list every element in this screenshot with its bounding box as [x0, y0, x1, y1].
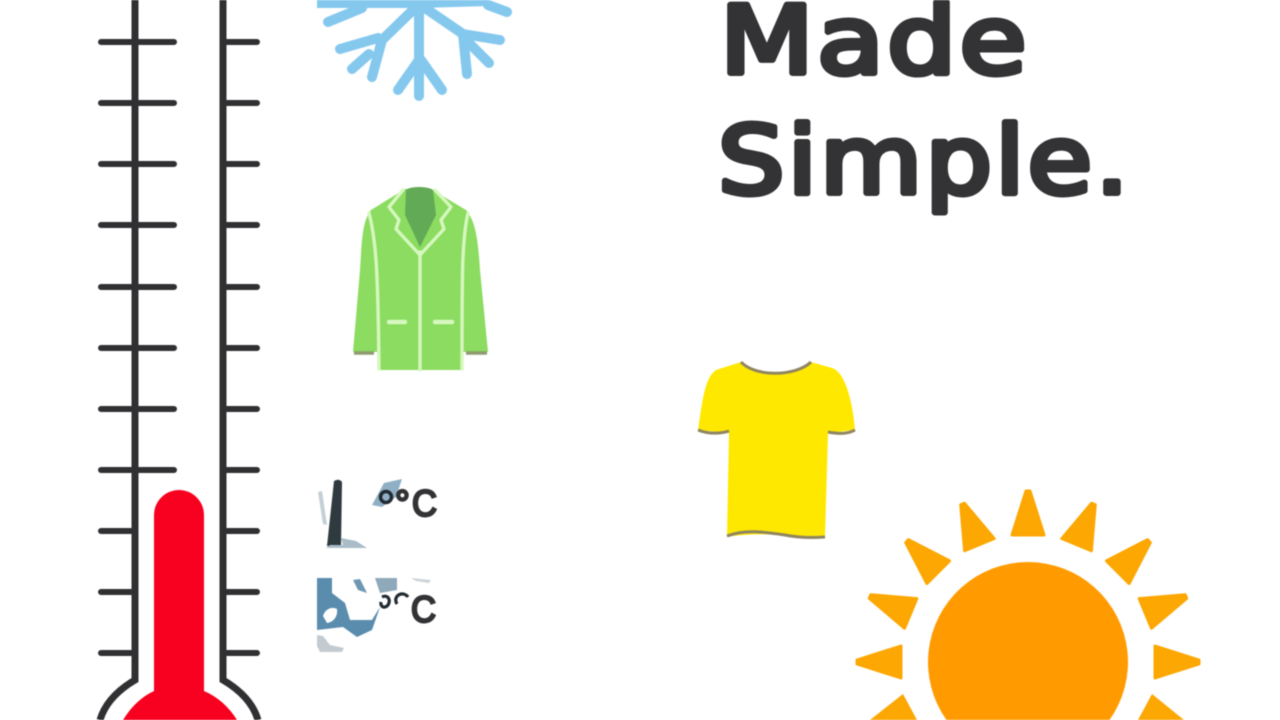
label: lower temperature: [317, 578, 436, 652]
icon: snowflake: [317, 1, 507, 96]
label: upper temperature: [318, 479, 437, 548]
title line: Simple.: Simple.: [718, 107, 1132, 216]
label: upper temperature: C: [412, 483, 437, 524]
label: lower temperature: C: [411, 589, 436, 630]
icon: thermometer: [100, 0, 258, 720]
icon: green coat: [353, 187, 488, 370]
thermometer red fill: [123, 490, 237, 720]
title: [718, 0, 1132, 216]
sun disc: [928, 562, 1128, 720]
sun rays: [857, 491, 1199, 720]
label: upper temperature: °: [395, 483, 410, 524]
icon: yellow t-shirt: [698, 362, 855, 538]
icon: sun: [857, 491, 1199, 720]
